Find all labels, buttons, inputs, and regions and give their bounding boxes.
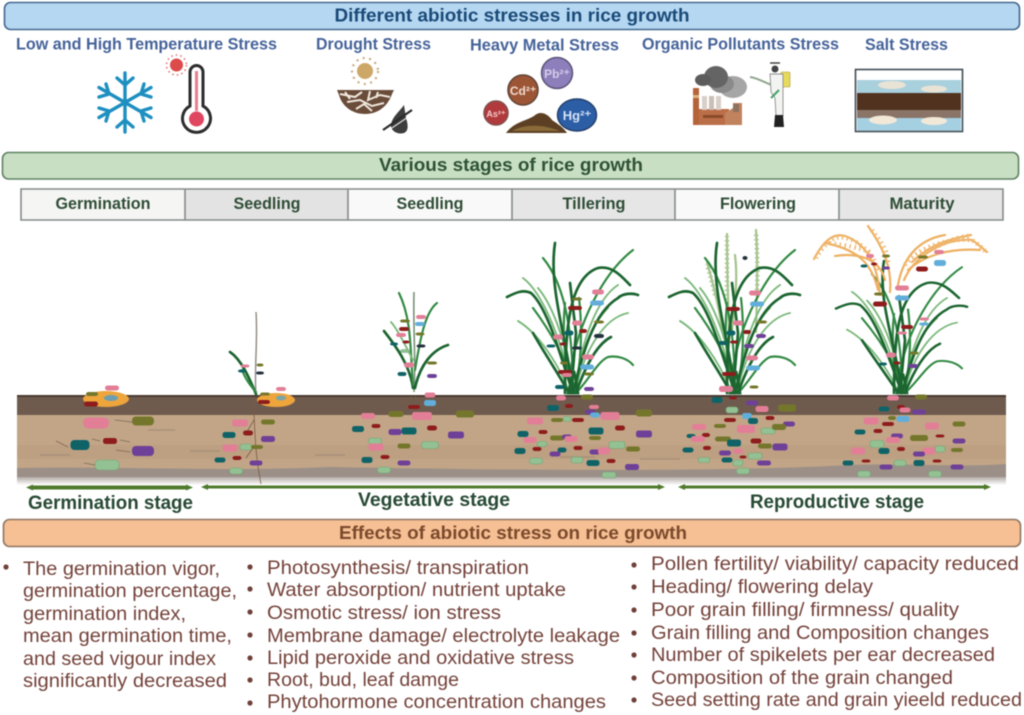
effects list: vegetative stage xyxy=(247,557,620,713)
icon: pesticide sprayer person xyxy=(750,63,790,127)
table of growth stages: Seedling xyxy=(234,194,300,213)
effects list: reproductive stage: Seed setting rate and grain yieeld reduced xyxy=(651,689,1022,711)
effects list: germination stage: mean germination time, xyxy=(23,625,232,647)
table of growth stages: Flowering xyxy=(720,194,796,213)
icon: factory with smoke xyxy=(693,66,747,125)
arrow: vegetative stage: Vegetative stage xyxy=(358,489,510,511)
effects list: vegetative stage: Water absorption/ nutrient uptake xyxy=(267,579,566,601)
effects list: vegetative stage: Osmotic stress/ ion stress xyxy=(267,602,501,624)
soil cross-section xyxy=(17,395,1006,485)
table of growth stages: Germination xyxy=(56,194,150,213)
effects list: germination stage: The germination vigor, xyxy=(23,558,220,580)
effects list: vegetative stage: Root, bud, leaf damge xyxy=(267,669,459,691)
icon: heavy metals: Cd²⁺ xyxy=(510,84,536,98)
effects list: reproductive stage: Grain filling and Composition changes xyxy=(651,622,989,644)
effects list: vegetative stage: Phytohormone concentration changes xyxy=(267,691,606,713)
effects list: reproductive stage: Composition of the grain changed xyxy=(651,667,953,689)
effects list: vegetative stage: Photosynthesis/ transpiration xyxy=(267,557,529,579)
germination stage seed and microbes xyxy=(56,386,154,470)
stress type labels: Drought Stress xyxy=(316,34,431,54)
effects list: germination stage xyxy=(3,558,237,692)
arrow: reproductive stage xyxy=(678,484,991,513)
effects list: reproductive stage: Heading/ flowering delay xyxy=(651,576,873,598)
effects list: reproductive stage: Number of spikelets per ear decreased xyxy=(651,644,995,666)
icon: snowflake xyxy=(99,73,151,132)
arrow: reproductive stage: Reproductive stage xyxy=(750,491,924,513)
stress type labels: Salt Stress xyxy=(865,35,948,54)
icon: heavy metals: As²⁺ xyxy=(486,109,506,119)
stress type labels: Organic Pollutants Stress xyxy=(642,34,839,54)
banner: effects of abiotic stress xyxy=(4,520,1020,546)
effects list: germination stage: significantly decreased xyxy=(23,670,227,692)
stress type labels: Heavy Metal Stress xyxy=(470,36,619,54)
title banner: abiotic stresses: Different abiotic stresses in rice growth xyxy=(334,6,690,26)
flowering plant xyxy=(669,230,800,474)
table of growth stages: Maturity xyxy=(890,194,955,213)
effects list: reproductive stage: Poor grain filling/ firmness/ quality xyxy=(651,599,959,621)
table of growth stages xyxy=(21,189,1003,220)
effects list: germination stage: germination percentage, xyxy=(23,580,237,602)
arrow: vegetative stage xyxy=(201,484,665,511)
stress type labels xyxy=(16,34,948,54)
seedling plant 1 xyxy=(214,312,295,484)
maturity plant xyxy=(814,226,987,477)
arrow: germination stage: Germination stage xyxy=(28,492,193,514)
effects list: germination stage: and seed vigour index xyxy=(23,648,216,670)
seedling plant 2 xyxy=(352,292,474,473)
effects list: reproductive stage: Pollen fertility/ viability/ capacity reduced xyxy=(651,553,1019,575)
effects list: reproductive stage xyxy=(631,553,1022,711)
icon: heavy metals: Pb²⁺ xyxy=(544,67,570,81)
banner: effects of abiotic stress: Effects of abiotic stress on rice growth xyxy=(339,523,687,543)
effects list: vegetative stage: Lipid peroxide and oxidative stress xyxy=(267,647,574,669)
icon: drought xyxy=(337,58,414,134)
banner: various stages xyxy=(2,152,1018,179)
table of growth stages: Tillering xyxy=(562,194,626,213)
icon: thermometer and sun xyxy=(166,55,210,132)
effects list: vegetative stage: Membrane damage/ electrolyte leakage xyxy=(267,625,620,647)
icon: salt soil layers xyxy=(856,70,962,132)
tillering plant xyxy=(507,243,652,478)
table of growth stages: Seedling xyxy=(396,194,464,213)
icon: heavy metals xyxy=(484,58,596,133)
title banner: abiotic stresses xyxy=(4,2,1020,30)
stress type labels: Low and High Temperature Stress xyxy=(16,34,277,54)
banner: various stages: Various stages of rice growth xyxy=(379,155,643,175)
effects list: germination stage: germination index, xyxy=(23,603,186,625)
icon: heavy metals: Hg²⁺ xyxy=(563,108,591,123)
